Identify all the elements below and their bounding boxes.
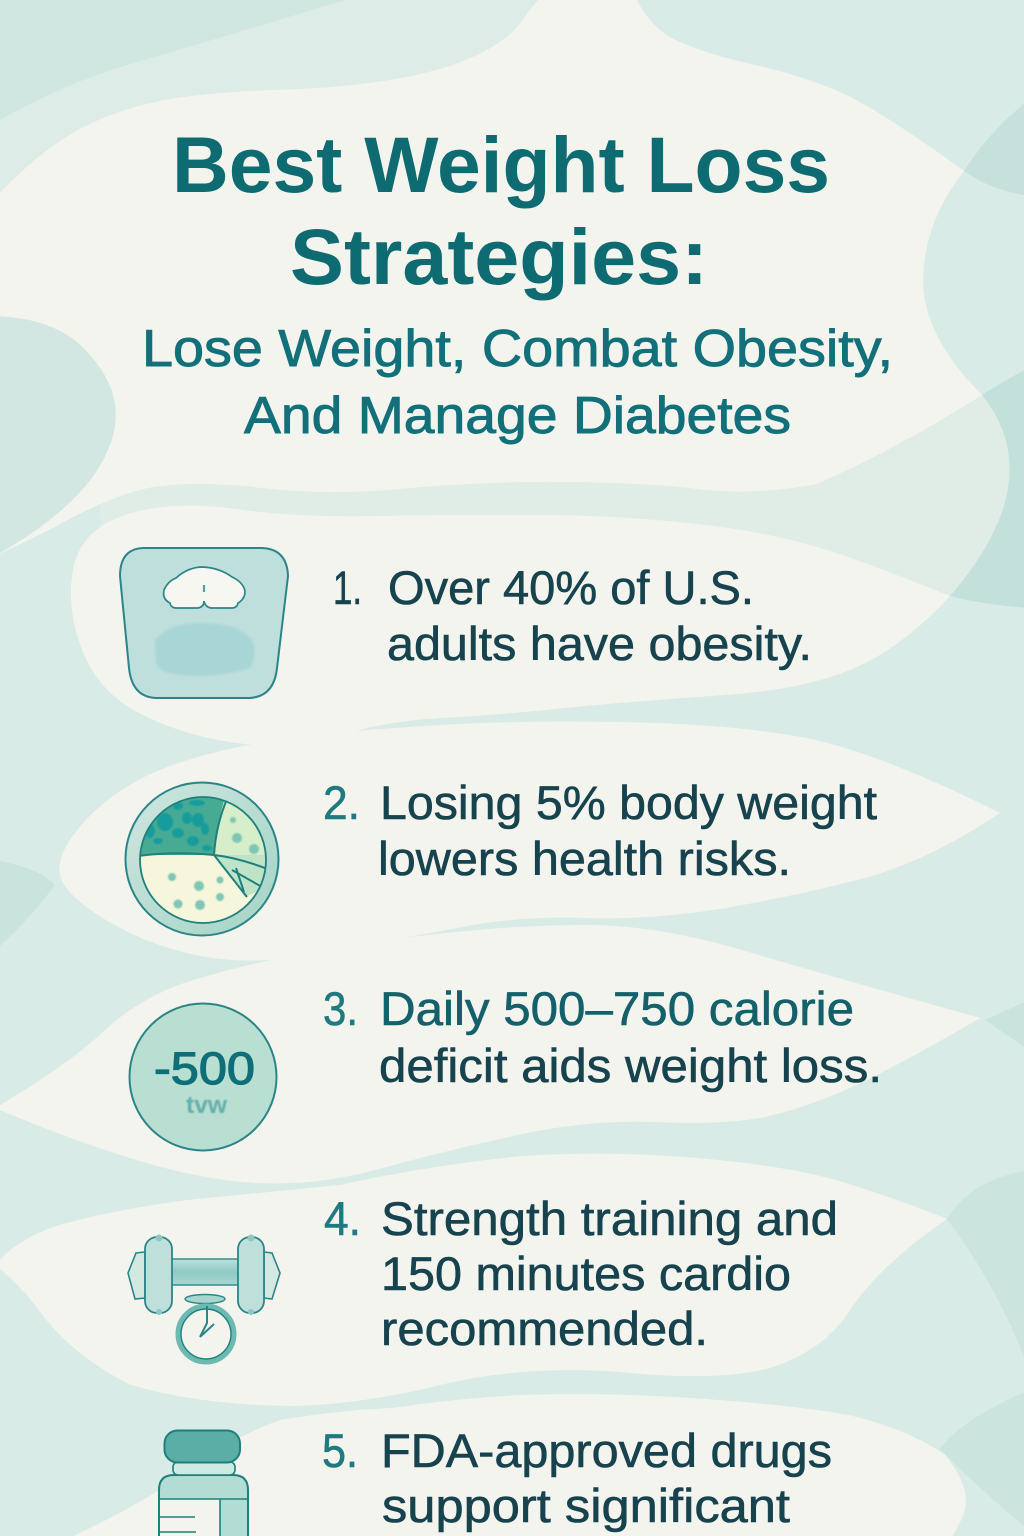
- panel: item 2 background: [59, 722, 1000, 961]
- icon: minus 500 calorie badge: tvw: [186, 1092, 227, 1119]
- panel: item 3 background: [0, 925, 980, 1183]
- item 5 text: support significant: [382, 1479, 790, 1532]
- icon: divided plate: [126, 782, 278, 936]
- panel: item 1 background: [71, 506, 950, 746]
- item 5 text: FDA-approved drugs: [381, 1424, 832, 1477]
- item 2 text: Losing 5% body weight: [380, 776, 877, 829]
- item 3 text: [323, 982, 882, 1092]
- item 2 text: [323, 776, 877, 885]
- item 3 text: Daily 500–750 calorie: [380, 982, 854, 1035]
- item 3 text: 3.: [323, 982, 358, 1035]
- panel: left background blob: [0, 316, 116, 556]
- panel: item 5 background: [65, 1394, 966, 1536]
- item 5: medication: [159, 1424, 832, 1536]
- title: Strategies:: [290, 212, 708, 301]
- item 4 text: 150 minutes cardio: [381, 1247, 791, 1300]
- item 4: exercise: [128, 1192, 838, 1362]
- item 1 text: [333, 561, 812, 670]
- item 4 text: recommended.: [381, 1302, 708, 1355]
- icon: minus 500 calorie badge: -500: [154, 1043, 255, 1094]
- title: Best Weight Loss: [172, 120, 830, 209]
- item 5 text: [322, 1424, 832, 1532]
- icon: minus 500 calorie badge: [130, 1004, 276, 1150]
- item 3 text: deficit aids weight loss.: [379, 1039, 882, 1092]
- item 1 text: 1.: [333, 561, 362, 614]
- item 4 text: [324, 1192, 838, 1355]
- subtitle: [142, 320, 893, 445]
- icon: dumbbell and stopwatch: [128, 1234, 280, 1362]
- item 1 text: adults have obesity.: [387, 617, 812, 670]
- icon: bathroom scale: [120, 548, 288, 698]
- item 3: calorie deficit: [130, 982, 882, 1150]
- item 1: obesity statistic: [120, 548, 812, 698]
- subtitle: And Manage Diabetes: [244, 387, 791, 445]
- item 2 text: lowers health risks.: [378, 832, 791, 885]
- item 4 text: Strength training and: [381, 1192, 838, 1245]
- icon: pill bottle: [159, 1430, 249, 1536]
- item 2: health risks: [126, 776, 877, 936]
- panel: item 4 background: [0, 1154, 947, 1406]
- title: [172, 120, 830, 301]
- item 5 text: 5.: [322, 1424, 358, 1477]
- item 4 text: 4.: [324, 1192, 361, 1245]
- item 2 text: 2.: [323, 776, 360, 829]
- item 1 text: Over 40% of U.S.: [388, 561, 754, 614]
- panel: title area background: [0, 0, 982, 556]
- subtitle: Lose Weight, Combat Obesity,: [142, 320, 893, 378]
